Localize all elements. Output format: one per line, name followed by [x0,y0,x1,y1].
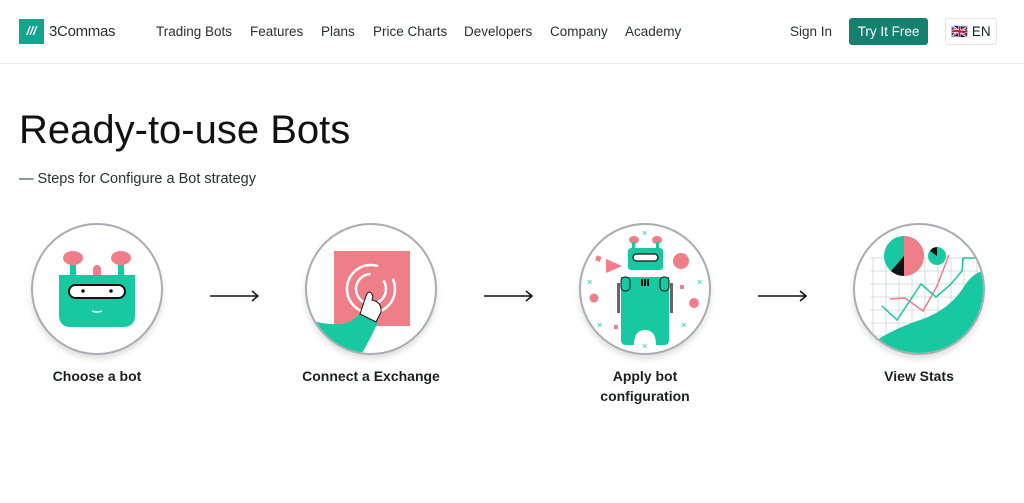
icon: robot config [580,224,710,354]
nav links: Company [550,24,608,39]
icon: robot config: × [642,341,647,351]
nav links: Plans [321,24,355,39]
sign in: Sign In [790,24,832,39]
subtitle: — Steps for Configure a Bot strategy [19,171,256,187]
label: view stats: View Stats [884,368,954,384]
arrow 2 [484,291,532,301]
arrow 3 [758,291,806,301]
label: connect exchange: Connect a Exchange [302,368,440,384]
icon: robot config: × [681,320,686,330]
nav links [156,24,682,39]
label: apply config: configuration [600,388,690,404]
label: choose a bot: Choose a bot [53,368,141,384]
icon: robot config: × [587,277,592,287]
try button: Try It Free [858,24,919,39]
arrow 1 [210,291,258,301]
icon: bot [32,224,162,354]
nav links: Trading Bots [156,24,232,39]
title: Ready-to-use Bots [19,108,350,152]
icon: robot config: × [597,320,602,330]
label: apply config: Apply bot [613,368,677,384]
icon: robot config: × [642,228,647,238]
nav bar [0,0,1024,64]
language button [945,18,997,45]
icon: stats chart [854,224,990,360]
language button: 🇬🇧 EN [951,24,991,39]
logo: 3Commas [49,23,115,40]
nav links: Academy [625,24,681,39]
label: apply config [600,368,690,404]
icon: robot config: × [697,277,702,287]
try button [849,18,928,45]
icon: connect exchange [300,224,436,360]
steps graphic [30,223,986,360]
nav links: Developers [464,24,532,39]
nav links: Features [250,24,303,39]
logo: /// [26,24,36,38]
logo [19,19,115,44]
nav links: Price Charts [373,24,447,39]
